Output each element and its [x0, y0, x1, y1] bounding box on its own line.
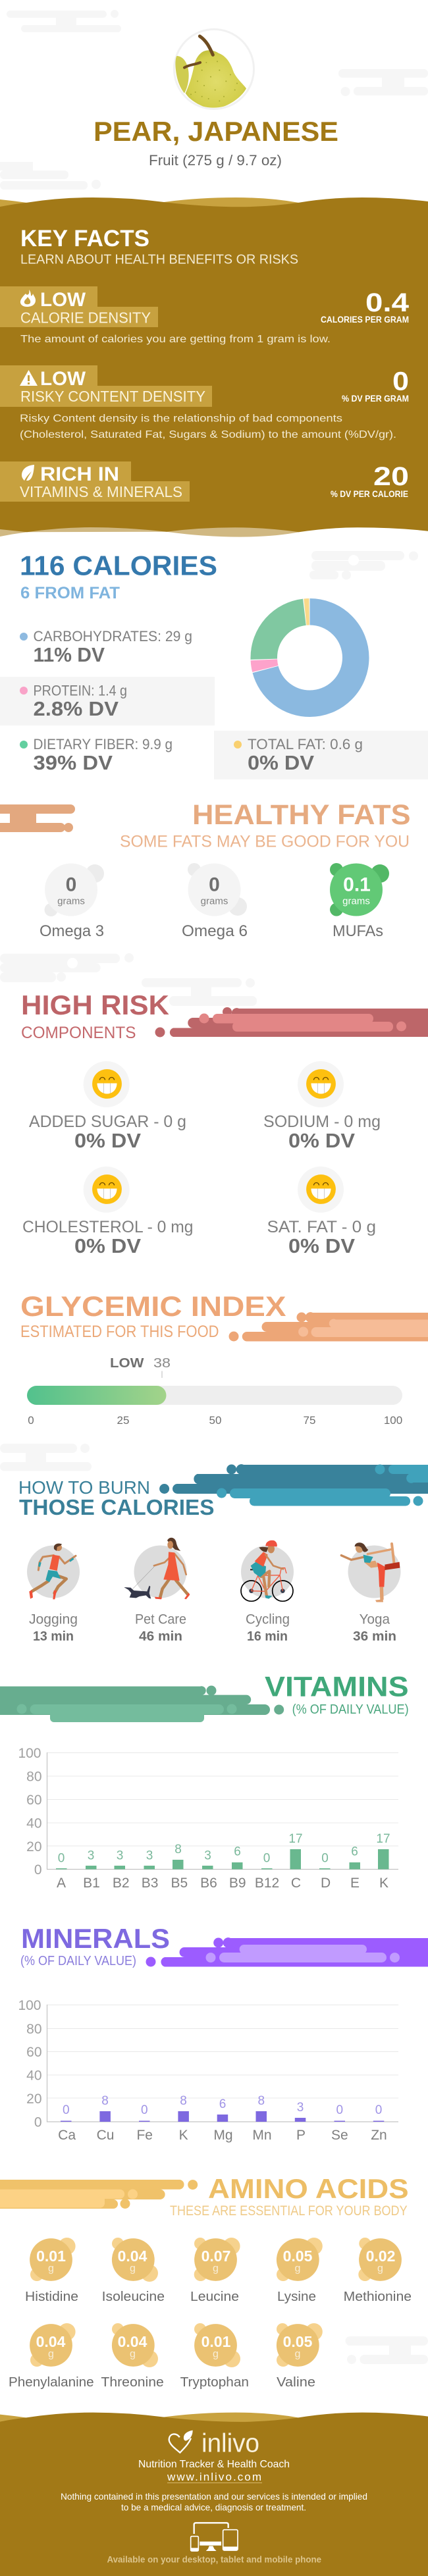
amino: threonine: 0.04 [118, 2333, 147, 2350]
amino: tryptophan: g [213, 2349, 219, 2359]
amino: valine: g [295, 2349, 300, 2359]
amino: phenylalanine: Phenylalanine [9, 2375, 94, 2390]
amino: tryptophan: Tryptophan [180, 2375, 249, 2390]
chart: vitamins bar chart: B12 [255, 1876, 279, 1891]
chart: vitamins bar chart: 6 [234, 1845, 241, 1859]
stat: mufas: 0.1 [343, 874, 371, 895]
panel: high risk components [21, 989, 428, 1257]
item: cholesterol: 0% DV [74, 1234, 141, 1257]
amino: lysine: Lysine [277, 2290, 316, 2304]
panel: amino acids [0, 2173, 412, 2390]
text: tagline: Nutrition Tracker & Health Coach [138, 2459, 290, 2470]
chart: vitamins bar chart: 17 [288, 1832, 303, 1846]
subheading: key facts: LEARN ABOUT HEALTH BENEFITS OR RISKS [20, 253, 298, 267]
amino: methionine [344, 2238, 412, 2304]
subheading: glycemic index: ESTIMATED FOR THIS FOOD [20, 1323, 219, 1341]
icon: warning triangle [20, 370, 38, 386]
chart: minerals bar chart: 0 [34, 2115, 42, 2130]
heading: those calories: THOSE CALORIES [19, 1495, 215, 1519]
amino: isoleucine: Isoleucine [102, 2290, 165, 2304]
banner: vitamins [0, 1685, 284, 1722]
chart: vitamins bar chart: 3 [146, 1849, 153, 1863]
chart: minerals bar chart: Cu [97, 2128, 114, 2143]
chart: vitamins bar chart: 20 [26, 1839, 42, 1854]
chart: minerals bar chart: Ca [58, 2128, 76, 2143]
chart: vitamins bar chart: B5 [171, 1876, 188, 1891]
fact: calorie density: CALORIE DENSITY [20, 309, 151, 327]
amino: isoleucine: 0.04 [118, 2247, 147, 2265]
activity: jogging: 13 min [33, 1629, 74, 1644]
activity: cycling: Cycling [246, 1612, 290, 1627]
amino: methionine: 0.02 [366, 2247, 395, 2265]
amino: histidine: Histidine [25, 2290, 78, 2304]
item: saturated fat: 0% DV [288, 1234, 355, 1257]
marker: glycemic value: LOW [110, 1356, 144, 1371]
legend: protein: PROTEIN: 1.4 g [33, 682, 127, 699]
item: sodium [263, 1061, 381, 1152]
stat: omega 6: 0 [209, 874, 220, 895]
chart: vitamins bar chart: 100 [18, 1746, 41, 1761]
amino: histidine [25, 2238, 78, 2304]
chart: minerals bar chart: 0 [336, 2103, 343, 2117]
chart: minerals bar chart [18, 1998, 398, 2143]
chart: vitamins bar chart: 17 [376, 1832, 390, 1846]
link: website: www.inlivo.com [167, 2471, 261, 2483]
activity: yoga [341, 1542, 400, 1644]
amino: threonine: g [130, 2349, 136, 2359]
panel: glycemic index [20, 1291, 428, 1427]
panel: vitamins [0, 1671, 409, 1891]
chart: vitamins bar chart: 3 [117, 1849, 123, 1863]
fact: calorie density [0, 286, 410, 345]
item: added sugar: ADDED SUGAR - 0 g [29, 1113, 186, 1131]
chart: vitamins bar chart: 3 [88, 1849, 94, 1863]
fact: risky content density: % DV PER GRAM [342, 394, 409, 404]
chart: vitamins bar chart: B1 [83, 1876, 100, 1891]
chart: vitamins bar chart: 8 [174, 1843, 182, 1856]
chart: vitamins bar chart: 0 [321, 1851, 329, 1866]
stat: omega 3: 0 [66, 874, 76, 895]
stat: omega 3 [40, 864, 104, 940]
activity: pet care: Pet Care [135, 1612, 186, 1627]
chart: minerals bar chart: 0 [141, 2103, 148, 2117]
chart: vitamins bar chart: 40 [26, 1816, 42, 1831]
amino: tryptophan [180, 2323, 249, 2390]
amino: methionine: Methionine [344, 2290, 412, 2304]
chart: minerals bar chart: 6 [219, 2097, 226, 2111]
item: saturated fat [267, 1167, 376, 1257]
fact: rich in vitamins and minerals: RICH IN [40, 463, 119, 485]
amino: valine: 0.05 [283, 2333, 313, 2350]
chart: vitamins bar chart: C [291, 1876, 301, 1891]
legend: carbohydrates: 11% DV [33, 643, 105, 666]
fact: risky content density: (Cholesterol, Saturated Fat, Sugars & Sodium) to the amount (%DV/gr). [20, 429, 396, 440]
stat: omega 3: Omega 3 [40, 922, 104, 940]
legend: total fat: 0% DV [248, 751, 314, 774]
amino: phenylalanine: 0.04 [36, 2333, 66, 2350]
item: sodium: 0% DV [288, 1129, 355, 1152]
activity: cycling [241, 1540, 294, 1644]
stat: mufas [330, 863, 389, 940]
text: availability: Available on your desktop, tablet and mobile phone [107, 2554, 321, 2565]
legend: dietary fiber: DIETARY FIBER: 9.9 g [33, 736, 173, 752]
legend: total fat [214, 731, 428, 779]
chart: minerals bar chart: 0 [375, 2103, 382, 2117]
fact: risky content density: Risky Content density is the relationship of bad components [20, 413, 342, 424]
chart: vitamins bar chart: B6 [200, 1876, 217, 1891]
fact: risky content density [0, 365, 409, 440]
amino: lysine: g [295, 2263, 300, 2274]
chart: vitamins bar chart: A [57, 1876, 66, 1891]
fact: calorie density: LOW [40, 289, 86, 311]
chart: vitamins bar chart: K [379, 1876, 388, 1891]
heading: high risk: HIGH RISK [21, 989, 169, 1020]
banner: high risk [155, 1007, 428, 1038]
chart: vitamins bar chart: B2 [113, 1876, 130, 1891]
heading: key facts: KEY FACTS [20, 226, 149, 251]
heading: healthy fats: HEALTHY FATS [192, 799, 411, 831]
amino: leucine [190, 2238, 240, 2304]
stat: omega 6 [182, 863, 248, 940]
legend: carbohydrates [20, 628, 192, 666]
chart: minerals bar chart: Fe [136, 2128, 153, 2143]
subheading: 6 from fat: 6 FROM FAT [20, 584, 120, 602]
chart: vitamins bar chart: 3 [204, 1849, 211, 1863]
fact: rich in vitamins and minerals: VITAMINS & MINERALS [20, 483, 182, 500]
chart: glycemic scale [27, 1386, 402, 1427]
panel: minerals [18, 1923, 428, 2143]
activity: pet care: 46 min [139, 1629, 182, 1644]
chart: minerals bar chart: 40 [26, 2068, 42, 2083]
amino: lysine [277, 2238, 323, 2304]
chart: vitamins bar chart: 0 [34, 1862, 42, 1878]
legend: dietary fiber [20, 736, 173, 774]
item: saturated fat: SAT. FAT - 0 g [267, 1218, 376, 1236]
chart: vitamins bar chart: 6 [351, 1845, 358, 1859]
panel: how to burn calories [18, 1464, 428, 1644]
chart: minerals bar chart: 80 [26, 2022, 42, 2037]
activity: pet care [124, 1538, 190, 1644]
legend: dietary fiber: 39% DV [33, 751, 113, 774]
chart: vitamins bar chart: 80 [26, 1770, 42, 1784]
chart: glycemic scale: 25 [117, 1414, 129, 1427]
fact: rich in vitamins and minerals: 20 [373, 462, 409, 491]
chart: vitamins bar chart: 0 [58, 1851, 65, 1866]
activity: yoga: Yoga [360, 1612, 390, 1627]
banner: burn [159, 1464, 428, 1506]
chart: glycemic scale: 0 [28, 1414, 34, 1427]
banner: amino acids [0, 2180, 198, 2209]
fact: rich in vitamins and minerals: % DV PER CALORIE [331, 489, 408, 499]
chart: minerals bar chart: 60 [26, 2045, 42, 2060]
subheading: components: COMPONENTS [21, 1024, 136, 1042]
chart: minerals bar chart: 8 [180, 2094, 187, 2108]
fact: risky content density: LOW [40, 368, 86, 390]
chart: vitamins bar chart: 0 [263, 1851, 270, 1866]
activity: yoga: 36 min [353, 1629, 396, 1644]
fact: rich in vitamins and minerals [0, 461, 409, 502]
text: disclaimer [61, 2491, 367, 2513]
amino: leucine: g [213, 2263, 219, 2274]
subtitle: Fruit (275 g / 9.7 oz) [149, 152, 282, 169]
icon: flame [20, 290, 36, 307]
legend: protein [0, 677, 215, 725]
amino: leucine: 0.07 [201, 2247, 230, 2265]
chart: minerals bar chart: 0 [63, 2103, 70, 2117]
chart: minerals bar chart: 100 [18, 1998, 41, 2013]
logo: inlivo: inlivo [201, 2429, 259, 2458]
panel: calories [0, 550, 428, 779]
stat: omega 6: grams [201, 895, 228, 907]
title: PEAR, JAPANESE [94, 116, 338, 147]
legend: total fat: TOTAL FAT: 0.6 g [248, 736, 363, 752]
chart: minerals bar chart: K [179, 2128, 188, 2143]
amino: threonine [101, 2323, 164, 2390]
chart: macronutrient donut [264, 612, 356, 704]
banner: healthy fats [0, 804, 75, 832]
banner: glycemic [229, 1312, 428, 1342]
legend: protein: 2.8% DV [33, 697, 119, 720]
chart: vitamins bar chart: B9 [229, 1876, 246, 1891]
amino: isoleucine: g [130, 2263, 136, 2274]
heading: vitamins: VITAMINS [265, 1671, 409, 1702]
logo: inlivo [169, 2429, 259, 2458]
fact: calorie density: 0.4 [365, 288, 410, 317]
amino: threonine: Threonine [101, 2375, 164, 2390]
item: added sugar [29, 1061, 186, 1152]
chart: minerals bar chart: P [296, 2128, 306, 2143]
subheading: healthy fats: SOME FATS MAY BE GOOD FOR YOU [120, 832, 410, 851]
heading: minerals: MINERALS [21, 1923, 170, 1954]
amino: histidine: 0.01 [36, 2247, 66, 2265]
amino: methionine: g [377, 2263, 383, 2274]
amino: lysine: 0.05 [283, 2247, 313, 2265]
icon: leaf [22, 465, 34, 481]
item: added sugar: 0% DV [74, 1129, 141, 1152]
stat: mufas: MUFAs [333, 922, 383, 940]
heading: 116 calories: 116 CALORIES [20, 550, 217, 581]
chart: vitamins bar chart: B3 [142, 1876, 158, 1891]
amino: histidine: g [48, 2263, 54, 2274]
chart: vitamins bar chart: 60 [26, 1793, 42, 1808]
amino: phenylalanine [9, 2323, 94, 2390]
fact: calorie density: The amount of calories you are getting from 1 gram is low. [20, 334, 331, 345]
amino: valine: Valine [277, 2375, 315, 2390]
subheading: percent of daily value: (% OF DAILY VALUE) [292, 1702, 409, 1717]
chart: vitamins bar chart [18, 1746, 398, 1891]
heading: glycemic index: GLYCEMIC INDEX [20, 1291, 286, 1323]
activity: cycling: 16 min [247, 1629, 288, 1644]
heading: how to burn: HOW TO BURN [18, 1477, 150, 1498]
chart: minerals bar chart: 8 [101, 2094, 109, 2108]
stat: omega 3: grams [57, 895, 85, 907]
chart: vitamins bar chart: D [321, 1876, 331, 1891]
chart: glycemic scale: 75 [304, 1414, 315, 1427]
amino: leucine: Leucine [190, 2290, 239, 2304]
amino: isoleucine [102, 2238, 165, 2304]
icon: pear photo [174, 29, 254, 109]
subheading: percent of daily value: (% OF DAILY VALUE) [20, 1954, 136, 1968]
banner: minerals [146, 1937, 428, 1967]
item: cholesterol: CHOLESTEROL - 0 mg [22, 1218, 194, 1236]
stat: mufas: grams [342, 895, 370, 907]
text: disclaimer: Nothing contained in this presentation and our services is intended or implied [61, 2491, 367, 2502]
chart: glycemic scale: 50 [209, 1414, 221, 1427]
chart: minerals bar chart: 3 [297, 2101, 304, 2115]
fact: calorie density: CALORIES PER GRAM [321, 315, 409, 325]
stat: omega 6: Omega 6 [182, 922, 248, 940]
legend: carbohydrates: CARBOHYDRATES: 29 g [33, 628, 192, 644]
amino: phenylalanine: g [48, 2349, 54, 2359]
heading: amino acids: AMINO ACIDS [208, 2173, 409, 2204]
panel: footer [0, 2413, 428, 2576]
chart: minerals bar chart: Mg [213, 2128, 233, 2143]
chart: minerals bar chart: Se [331, 2128, 348, 2143]
activity: jogging: Jogging [29, 1612, 78, 1627]
item: sodium: SODIUM - 0 mg [263, 1113, 381, 1131]
text: disclaimer: to be a medical advice, diagnosis or treatment. [121, 2502, 306, 2513]
panel: key facts [0, 197, 428, 537]
chart: minerals bar chart: 8 [258, 2094, 265, 2108]
marker: glycemic value: 38 [153, 1356, 171, 1371]
chart: glycemic scale: 100 [384, 1414, 402, 1427]
marker: glycemic value [110, 1356, 171, 1378]
chart: vitamins bar chart: E [350, 1876, 360, 1891]
amino: tryptophan: 0.01 [201, 2333, 231, 2350]
chart: minerals bar chart: Zn [371, 2128, 387, 2143]
chart: minerals bar chart: Mn [252, 2128, 272, 2143]
chart: minerals bar chart: 20 [26, 2091, 42, 2107]
amino: valine [277, 2323, 323, 2390]
activity: jogging [27, 1544, 80, 1644]
icon: devices [191, 2523, 238, 2551]
fact: risky content density: RISKY CONTENT DENSITY [20, 388, 205, 405]
panel: healthy fats [0, 799, 411, 940]
fact: risky content density: 0 [392, 367, 409, 396]
item: cholesterol [22, 1167, 194, 1257]
